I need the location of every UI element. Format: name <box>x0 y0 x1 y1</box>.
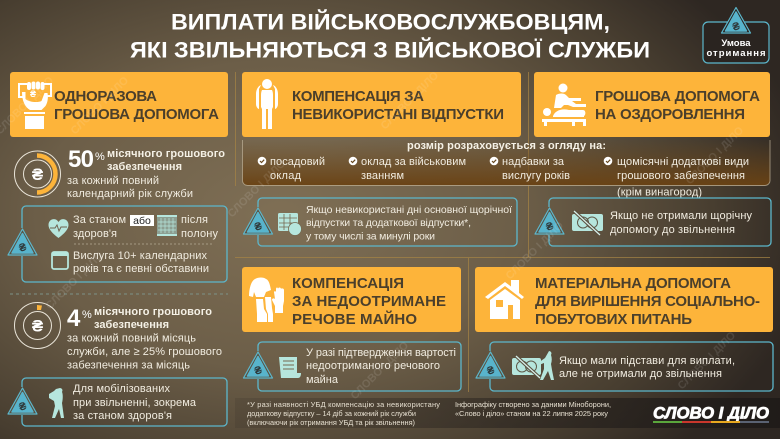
icon: triangle hryvnia: ₴ <box>17 400 29 414</box>
legend badge: умова отримання <box>703 8 769 63</box>
icon: crossed-out money and person <box>512 351 554 380</box>
source note: «Слово і діло» станом на 22 липня 2025 року <box>455 409 608 418</box>
watermarks: СЛОВО І ДІЛО <box>379 69 442 132</box>
logo: слово і діло: СЛОВО І ДІЛО <box>653 404 769 422</box>
icon: triangle hryvnia <box>8 229 37 255</box>
source note <box>455 400 611 418</box>
icon: triangle hryvnia: ₴ <box>253 364 264 378</box>
check item: посадовий оклад <box>258 156 325 182</box>
stat: 4 percent <box>14 302 222 372</box>
icon: coin dial 4 percent <box>14 302 60 348</box>
panel: розмір розраховується: розмір розраховується з огляду на: <box>407 140 606 152</box>
check item: оклад за військовим званням: оклад за військовим <box>361 156 466 168</box>
icon: hand holding banknote <box>18 82 52 129</box>
panel: компенсація речове майно <box>242 267 461 332</box>
panel: умова речове майно: майна <box>306 374 339 386</box>
dashed separator <box>10 293 228 295</box>
panel: компенсація за невикористані відпустки <box>242 72 521 137</box>
stat: 50 percent: 50 <box>68 146 94 173</box>
panel: умова матеріальна допомога: Якщо мали підстави для виплати, <box>559 355 735 367</box>
stat: 4 percent: забезпечення за місяць <box>67 360 190 372</box>
panel: умови 50 percent <box>8 206 227 282</box>
icon: walking soldier <box>49 388 64 418</box>
panel: для мобілізованих: Для мобілізованих <box>73 383 170 395</box>
icon: prison bars <box>157 216 177 235</box>
icon: triangle hryvnia <box>535 208 564 234</box>
check item: посадовий оклад: посадовий <box>270 156 325 168</box>
watermarks: СЛОВО І ДІЛО <box>226 157 289 220</box>
icon: clothing, boots, gloves <box>249 278 284 322</box>
panel: умова речове майно: У разі підтвердження вартості <box>306 347 456 359</box>
stat: 4 percent: 4 <box>67 305 81 332</box>
panel: компенсація речове майно: РЕЧОВЕ МАЙНО <box>292 310 417 328</box>
footnote: *У разі наявності УБД компенсацію за невикористану <box>247 400 440 409</box>
stat: 4 percent: % <box>82 309 92 321</box>
icon: triangle hryvnia: ₴ <box>253 220 264 234</box>
icon: calendar <box>52 252 68 269</box>
panel: одноразова грошова допомога: ₴ <box>30 89 36 99</box>
panel: умова речове майно <box>244 342 461 391</box>
panel: компенсація за невикористані відпустки: НЕВИКОРИСТАНІ ВІДПУСТКИ <box>292 106 504 123</box>
check item: надбавки: вислугу років <box>502 170 570 182</box>
watermarks: СЛОВО І ДІЛО <box>44 249 107 312</box>
watermarks: СЛОВО І ДІЛО <box>684 124 747 187</box>
panel: грошова допомога на оздоровлення: ГРОШОВА ДОПОМОГА <box>595 88 760 105</box>
check item: щомісячні додаткові види: щомісячні додаткові види <box>617 156 749 168</box>
icon: coin dial 50 percent: ₴ <box>32 165 44 184</box>
icon: triangle hryvnia <box>476 352 505 378</box>
watermarks: СЛОВО І ДІЛО <box>504 219 567 282</box>
check item: посадовий оклад: оклад <box>270 170 302 182</box>
icon: house <box>485 280 524 319</box>
footnote: (включаючи рік отримання УБД та рік звільнення) <box>247 418 415 427</box>
icon: massage <box>542 84 586 126</box>
legend badge: умова отримання: Умова <box>721 38 751 49</box>
icon: triangle hryvnia: ₴ <box>485 364 497 378</box>
section dividers <box>235 72 770 392</box>
source note: Інфографіку створено за даними Міноборони, <box>455 400 611 409</box>
icon: document list <box>279 357 301 378</box>
check item: оклад за військовим званням <box>349 156 466 182</box>
panel: матеріальна допомога: ПОБУТОВИХ ПИТАНЬ <box>535 311 692 328</box>
stat: 4 percent: за кожний повний місяць <box>67 332 196 344</box>
legend badge: умова отримання: ₴ <box>731 20 742 34</box>
panel: умови 50 percent: Вислуга 10+ календарних <box>73 250 208 262</box>
panel: матеріальна допомога: ДЛЯ ВИРІШЕННЯ СОЦІАЛЬНО- <box>535 293 760 310</box>
check item: надбавки: надбавки за <box>502 156 565 168</box>
panel: умова компенсації відпустки: Якщо невикористані дні основної щорічної <box>306 204 512 216</box>
stat: 50 percent: календарний рік служби <box>67 188 193 200</box>
legend badge: умова отримання: отримання <box>706 48 766 59</box>
icon: crossed-out money <box>572 211 603 235</box>
panel: умова речове майно: недоотриманого речового <box>306 360 440 372</box>
panel: для мобілізованих: при звільненні, зокрема <box>73 397 197 409</box>
watermarks: СЛОВО І ДІЛО <box>349 339 412 402</box>
panel: для мобілізованих <box>8 378 227 426</box>
panel: умова компенсації відпустки: у тому числі за минулі роки <box>306 230 435 242</box>
panel: умова оздоровлення <box>535 198 771 246</box>
panel: умова матеріальна допомога: але не отримали до звільнення <box>559 368 722 380</box>
title: ВИПЛАТИ ВІЙСЬКОВОСЛУЖБОВЦЯМ, <box>171 10 610 34</box>
watermarks: СЛОВО І ДІЛО <box>69 74 132 137</box>
check item: щомісячні додаткові види: (крім винагород) <box>617 186 702 198</box>
panel: одноразова грошова допомога: ГРОШОВА ДОПОМОГА <box>54 106 219 123</box>
footnote: додаткову відпустку – 14 діб за кожний рік служби <box>247 409 416 418</box>
panel: умова компенсації відпустки <box>244 198 517 246</box>
panel: умова оздоровлення: допомогу до звільнення <box>610 224 735 236</box>
panel: умови 50 percent: років та є певні обставини <box>73 263 209 275</box>
watermarks <box>0 69 747 402</box>
icon: soldier with backpack <box>256 79 278 129</box>
panel: одноразова грошова допомога <box>10 72 228 137</box>
panel: матеріальна допомога: МАТЕРІАЛЬНА ДОПОМОГА <box>535 275 731 292</box>
icon: triangle hryvnia <box>244 208 272 234</box>
panel: компенсація речове майно: КОМПЕНСАЦІЯ <box>292 275 404 292</box>
panel: умова оздоровлення: Якщо не отримали щорічну <box>610 210 752 222</box>
panel: умови 50 percent: За станом <box>73 214 126 226</box>
panel: умови 50 percent: після <box>181 214 208 226</box>
panel: грошова допомога на оздоровлення: НА ОЗДОРОВЛЕННЯ <box>595 106 745 123</box>
title: ЯКІ ЗВІЛЬНЯЮТЬСЯ З ВІЙСЬКОВОЇ СЛУЖБИ <box>130 38 650 62</box>
panel: компенсація за невикористані відпустки: КОМПЕНСАЦІЯ ЗА <box>292 88 424 105</box>
icon: heart <box>48 219 68 238</box>
check item: надбавки <box>490 156 570 182</box>
icon: coin dial 50 percent <box>14 151 60 197</box>
panel: умови 50 percent: здоров'я <box>73 228 117 240</box>
check item: щомісячні додаткові види <box>604 156 749 198</box>
panel: компенсація речове майно: ЗА НЕДООТРИМАНЕ <box>292 293 446 310</box>
footnote <box>247 400 440 427</box>
icon: triangle hryvnia: ₴ <box>544 220 556 234</box>
panel: грошова допомога на оздоровлення <box>534 72 770 137</box>
panel: розмір розраховується <box>242 140 770 198</box>
panel: для мобілізованих: за станом здоров'я <box>73 410 172 422</box>
stat: 50 percent: % <box>95 151 105 163</box>
check item: щомісячні додаткові види: грошового забезпечення <box>617 170 745 182</box>
panel: одноразова грошова допомога: ОДНОРАЗОВА <box>54 88 157 105</box>
panel: умови 50 percent: полону <box>181 228 218 240</box>
icon: coin dial 4 percent: ₴ <box>32 316 44 336</box>
stat: 50 percent: місячного грошового <box>107 148 225 160</box>
icon: calendar with bag <box>278 213 302 236</box>
icon: triangle hryvnia <box>244 352 272 378</box>
panel: матеріальна допомога <box>475 267 773 332</box>
stat: 50 percent: за кожний повний <box>67 175 159 187</box>
stat: 50 percent: забезпечення <box>107 161 182 173</box>
watermarks: СЛОВО І ДІЛО <box>676 329 739 392</box>
stat: 50 percent <box>14 146 225 200</box>
label: або: або <box>133 215 151 227</box>
icon: triangle hryvnia: ₴ <box>17 241 29 255</box>
panel: умова компенсації відпустки: відпустки та додаткової відпустки*, <box>306 217 471 229</box>
stat: 4 percent: служби, але ≥ 25% грошового <box>67 346 222 358</box>
stat: 4 percent: забезпечення <box>94 319 169 331</box>
footer strip <box>235 398 780 428</box>
title <box>130 10 650 62</box>
stat: 4 percent: місячного грошового <box>94 306 212 318</box>
check item: оклад за військовим званням: званням <box>361 170 404 182</box>
panel: умова матеріальна допомога <box>476 342 773 391</box>
icon: triangle hryvnia <box>8 388 37 414</box>
